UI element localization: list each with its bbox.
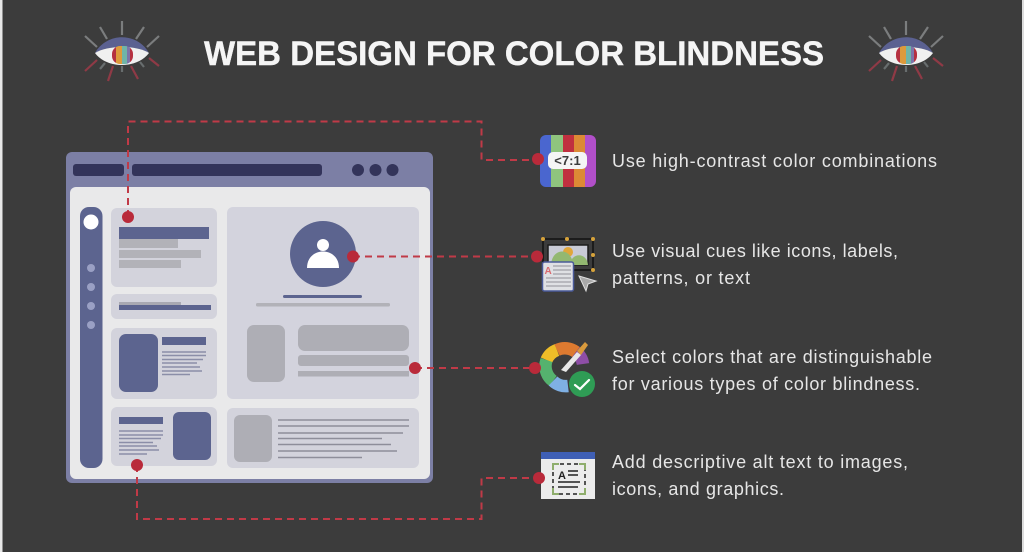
- icon: alt text: A: [558, 470, 566, 482]
- icon: left eye: [85, 21, 159, 81]
- icon: right eye: [869, 21, 943, 81]
- card: profile: [227, 207, 419, 399]
- card: image and text: [111, 328, 217, 399]
- marker dots on mockup: [122, 211, 421, 471]
- connector: contrast: [128, 122, 538, 217]
- browser mockup: [66, 152, 433, 483]
- address bar left: [73, 164, 124, 176]
- text: visual cues: [612, 241, 898, 288]
- browser frame: [66, 152, 433, 483]
- text: alt text: icons, and graphics.: [612, 479, 784, 499]
- text: distinguishable colors: Select colors that are distinguishable: [612, 347, 932, 367]
- text: alt text: [612, 452, 908, 499]
- icon: contrast ratio: [532, 135, 596, 187]
- connector: distinguishable colors: [415, 367, 535, 369]
- icon: color wheel: [529, 342, 595, 397]
- card: bottom text: [227, 408, 419, 468]
- text: alt text: Add descriptive alt text to images,: [612, 452, 908, 472]
- icon: visual cues: [531, 237, 596, 291]
- connector: alt text: [137, 465, 539, 519]
- text: distinguishable colors: for various types of color blindness.: [612, 374, 920, 394]
- card: text block: [111, 208, 217, 287]
- icon: alt text: [533, 452, 595, 499]
- window buttons: [352, 164, 398, 176]
- sidebar: [80, 207, 102, 468]
- avatar: [290, 221, 356, 287]
- text: distinguishable colors: [612, 347, 932, 394]
- text: visual cues: patterns, or text: [612, 268, 750, 288]
- text: visual cues: Use visual cues like icons, labels,: [612, 241, 898, 261]
- address bar main: [132, 164, 322, 176]
- card: small bar: [111, 294, 217, 319]
- content area: [70, 187, 430, 479]
- card: text and image: [111, 407, 217, 466]
- text: high contrast: Use high-contrast color combinations: [612, 151, 937, 171]
- connector: visual cues: [353, 256, 537, 258]
- title: WEB DESIGN FOR COLOR BLINDNESS: [204, 35, 824, 73]
- icon: contrast ratio: <7:1: [554, 153, 581, 168]
- icon: visual cues: A: [544, 266, 552, 277]
